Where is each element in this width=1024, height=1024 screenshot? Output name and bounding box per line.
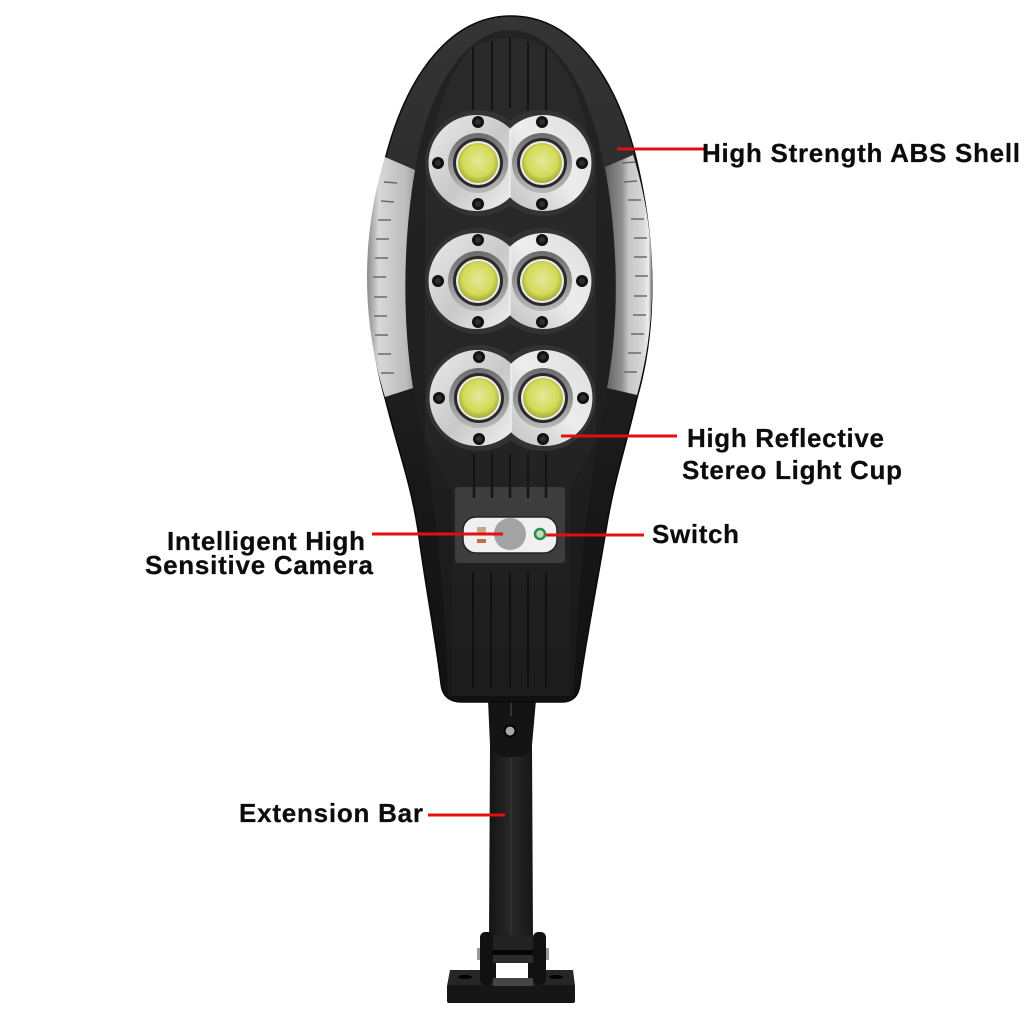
street light product xyxy=(367,16,652,1003)
callout: High Reflective Stereo Light Cup: High Reflective xyxy=(687,423,884,453)
control panel xyxy=(463,517,557,553)
callout: High Strength ABS Shell: High Strength ABS Shell xyxy=(702,138,1020,168)
housing ribs xyxy=(473,37,546,498)
callout: Intelligent High Sensitive Camera: Sensitive Camera xyxy=(145,550,374,580)
callout: Extension Bar: Extension Bar xyxy=(239,798,423,828)
switch button xyxy=(535,529,545,539)
light cups row 3 xyxy=(426,345,596,451)
mounting bracket xyxy=(447,932,575,1003)
sensor module xyxy=(455,486,565,563)
camera sensor xyxy=(494,518,526,550)
icon: bolt xyxy=(504,726,516,736)
lamp housing xyxy=(370,16,652,702)
inner panel xyxy=(425,38,596,696)
lower ribs xyxy=(473,572,546,688)
panel: right silver strip xyxy=(605,155,652,395)
light cups row 1 xyxy=(425,110,595,216)
extension bar xyxy=(488,700,536,940)
callout: Switch: Switch xyxy=(652,519,739,549)
panel: left silver strip xyxy=(367,157,415,397)
callout: High Reflective Stereo Light Cup xyxy=(561,423,902,485)
light cups row 2 xyxy=(425,228,595,334)
callout: Intelligent High Sensitive Camera xyxy=(145,526,503,580)
callout: High Reflective Stereo Light Cup: Stereo Light Cup xyxy=(682,455,902,485)
callout: Intelligent High Sensitive Camera: Intelligent High xyxy=(167,526,365,556)
dark channel xyxy=(404,30,616,696)
